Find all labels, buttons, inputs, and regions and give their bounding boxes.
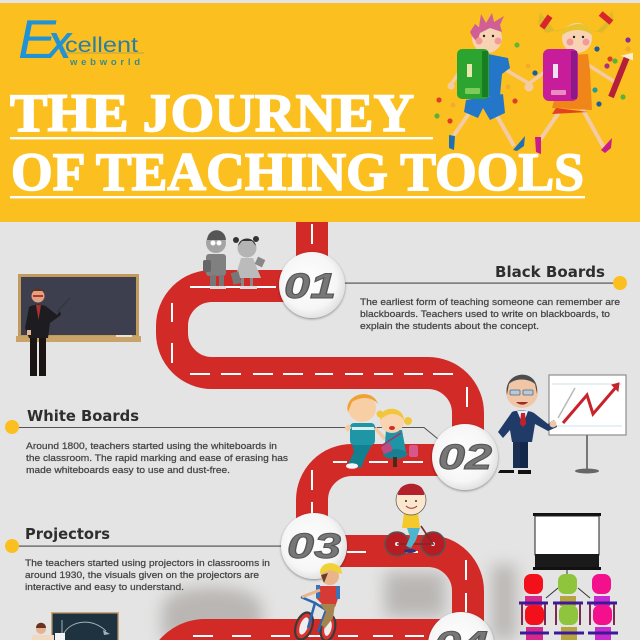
heading: white boards: White Boards (27, 407, 139, 425)
projector screen (533, 513, 601, 598)
heading: black boards: Black Boards (495, 263, 605, 281)
road lane dashes (172, 224, 467, 636)
text block: projectors: interactive and easy to understand. (25, 582, 184, 593)
icon: boy with green backpack (448, 13, 530, 151)
heading: projectors: Projectors (25, 525, 110, 543)
number badge 02 (432, 424, 498, 490)
number badge 01 (279, 252, 345, 318)
text block: black boards: blackboards. Teachers used to write on blackboards, to (360, 309, 610, 320)
panel: projectors text (5, 525, 284, 593)
panel: white boards text (5, 407, 438, 476)
text block: projectors: around 1930, the visuals given on the projectors are (25, 570, 259, 581)
blurred background shadows (162, 565, 516, 640)
title: OF TEACHING TOOLS (11, 142, 584, 202)
icon: child on red bicycle (385, 484, 445, 556)
number badge 03 (281, 513, 347, 579)
title (10, 83, 585, 202)
icon: child with helmet on blue bicycle (292, 563, 342, 640)
icon: teacher at chalkboard (32, 612, 119, 640)
number badge 03: 03 (287, 527, 342, 566)
panel: yellow header (0, 3, 640, 222)
icon: projector screen and audience (519, 513, 618, 640)
text block: white boards: made whiteboards easy to use and dust-free. (26, 465, 230, 476)
icon: grayscale children (203, 230, 265, 289)
text block: white boards: the classroom. The rapid marking and ease of erasing has (26, 453, 288, 464)
icon: two children holding hands (346, 394, 418, 469)
logo: cellent (65, 34, 138, 57)
audience seats (519, 574, 618, 640)
number badge 01: 01 (284, 267, 336, 306)
chart board (549, 375, 626, 474)
icon: businessman with chart (498, 375, 626, 474)
text block: projectors: The teachers started using projectors in classrooms in (25, 558, 270, 569)
icon: blackboard with teacher (16, 274, 141, 376)
number badge 04 (428, 612, 494, 640)
red winding road (165, 222, 468, 640)
logo: X (45, 25, 73, 66)
icon: confetti dots (434, 37, 631, 124)
logo: E (18, 8, 57, 70)
logo: webworld (69, 57, 140, 68)
icon: girl with pink backpack and pencil (524, 10, 632, 154)
panel: black boards text (340, 263, 627, 332)
title: THE JOURNEY (10, 83, 414, 143)
logo (18, 8, 144, 70)
text block: black boards: The earliest form of teaching someone can remember are (360, 297, 620, 308)
number badge 02: 02 (438, 438, 493, 477)
text block: black boards: explain the students about the concept. (360, 321, 539, 332)
text block: white boards: Around 1800, teachers started using the whiteboards in (26, 441, 277, 452)
